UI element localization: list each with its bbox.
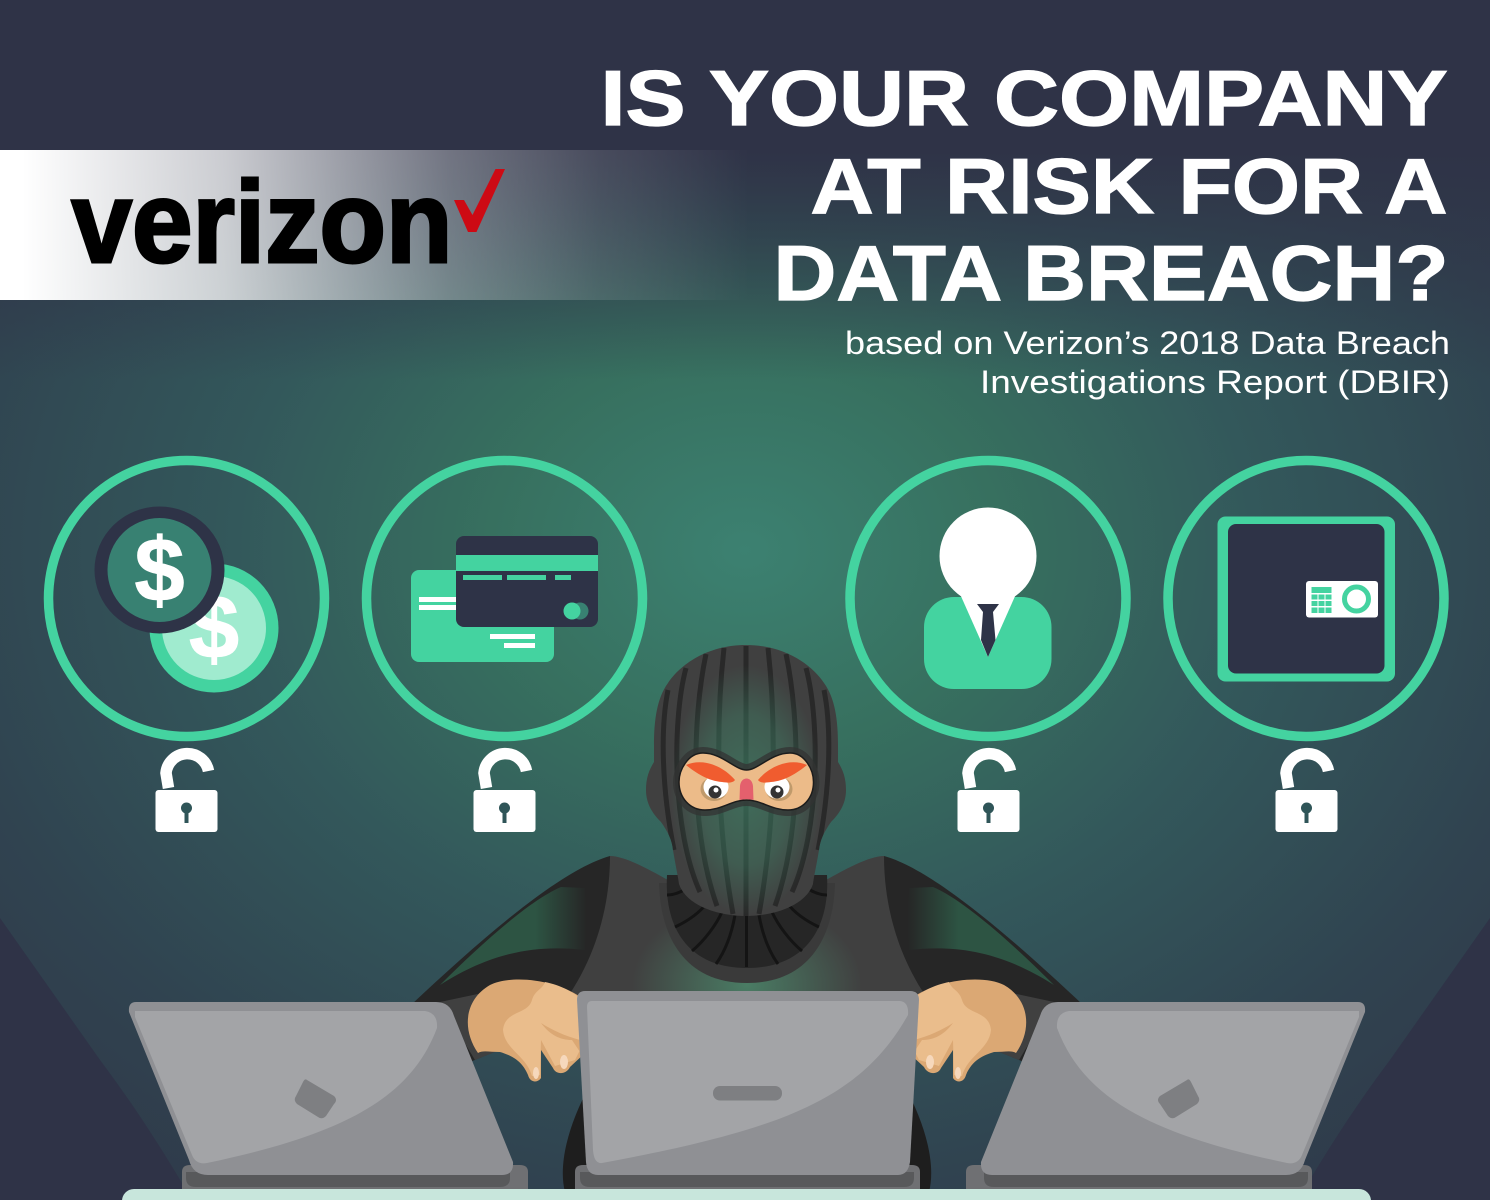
panel: money	[48, 460, 324, 736]
icon: dark coin	[94, 506, 224, 634]
panel: credit cards	[366, 460, 642, 736]
title: AT RISK FOR A	[810, 142, 1448, 230]
balaclava	[646, 645, 846, 916]
laptop: left	[129, 1002, 528, 1190]
torso	[569, 856, 925, 1070]
panel: person	[850, 460, 1126, 736]
subtitle	[845, 325, 1450, 400]
subtitle: Investigations Report (DBIR)	[980, 364, 1450, 400]
icon: open lock 1	[156, 754, 218, 832]
turtleneck collar	[667, 875, 827, 968]
panel: safe	[1168, 460, 1444, 736]
content panel top edge	[122, 1189, 1371, 1200]
icon: open lock 2	[474, 754, 536, 832]
verizon logo band: verizon	[72, 157, 452, 287]
nose	[740, 778, 754, 800]
icon: businessman	[924, 508, 1052, 689]
sleeves	[411, 856, 1083, 1062]
laptop: center	[575, 991, 920, 1190]
title: IS YOUR COMPANY	[600, 54, 1448, 142]
icon: light coin	[150, 564, 278, 692]
icon: open lock 4	[1276, 754, 1338, 832]
icon: vault	[1218, 516, 1395, 682]
verizon logo band	[0, 150, 750, 300]
icon: dark coin: $	[134, 521, 185, 621]
brows	[686, 762, 807, 783]
right hand	[909, 980, 1026, 1081]
icon: open lock 3	[958, 754, 1020, 832]
face opening	[679, 753, 814, 810]
subtitle: based on Verizon’s 2018 Data Breach	[845, 325, 1450, 361]
laptop: right	[966, 1002, 1365, 1190]
hacker figure	[411, 645, 1083, 1192]
title: DATA BREACH?	[774, 229, 1448, 317]
chair	[563, 1085, 931, 1192]
icon: dark card	[456, 536, 598, 627]
left hand	[468, 980, 585, 1081]
eyes	[700, 776, 792, 801]
icon: green card	[411, 570, 554, 662]
icon: light coin: $	[189, 578, 239, 678]
title	[600, 54, 1448, 317]
